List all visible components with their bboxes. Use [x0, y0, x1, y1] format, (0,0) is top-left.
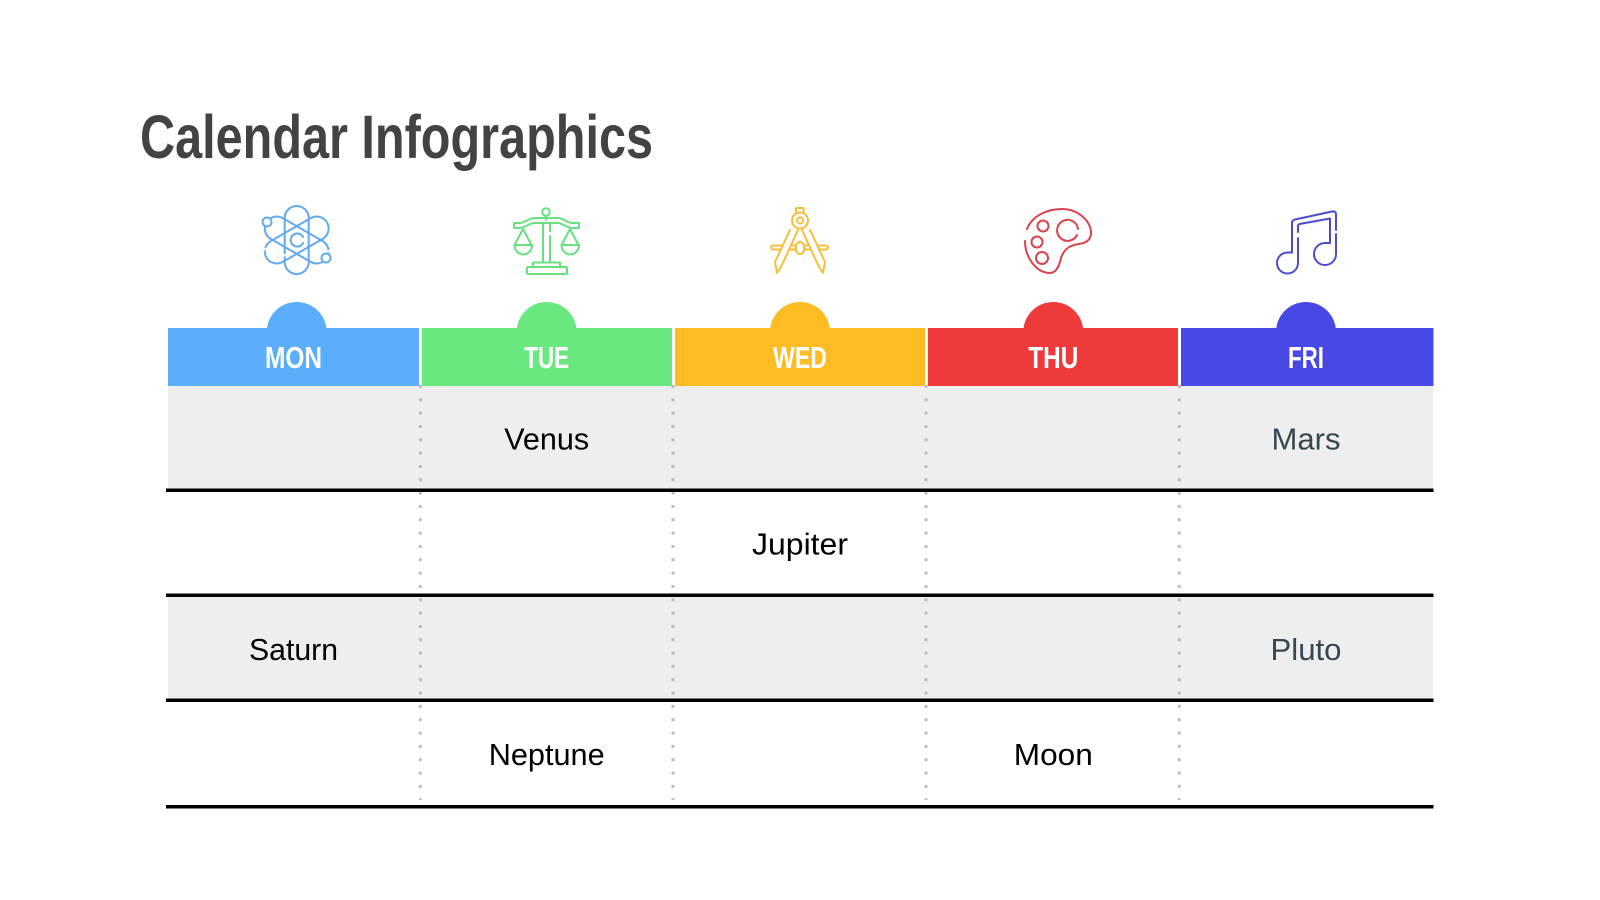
cell: Pluto: Pluto	[1270, 632, 1342, 667]
row 1 shading	[168, 385, 1433, 489]
cell: Venus: Venus	[504, 422, 589, 456]
icon: compass	[771, 208, 828, 273]
icon: scales	[514, 208, 579, 274]
icon: palette	[1025, 209, 1091, 273]
cell: Saturn: Saturn	[249, 632, 338, 667]
day header: FRI	[1181, 302, 1434, 386]
day header: TUE	[422, 302, 672, 386]
cell: Moon: Moon	[1014, 737, 1093, 772]
day header: MON: MON	[265, 340, 322, 375]
day header: TUE: TUE	[524, 340, 569, 375]
day header: THU	[928, 302, 1178, 386]
table rows	[168, 385, 1433, 700]
icon: atom	[260, 206, 333, 274]
icon: music note	[1277, 211, 1336, 274]
cell: Mars: Mars	[1272, 422, 1340, 456]
day header: WED: WED	[773, 340, 827, 375]
row 3 shading	[168, 595, 1433, 700]
day header: WED	[675, 302, 925, 386]
day header: MON	[168, 302, 419, 386]
day header: THU: THU	[1028, 340, 1078, 375]
day header: FRI: FRI	[1288, 340, 1324, 375]
cell: Neptune: Neptune	[489, 737, 605, 772]
cell: Jupiter: Jupiter	[752, 526, 848, 562]
title: Calendar Infographics	[140, 103, 653, 171]
